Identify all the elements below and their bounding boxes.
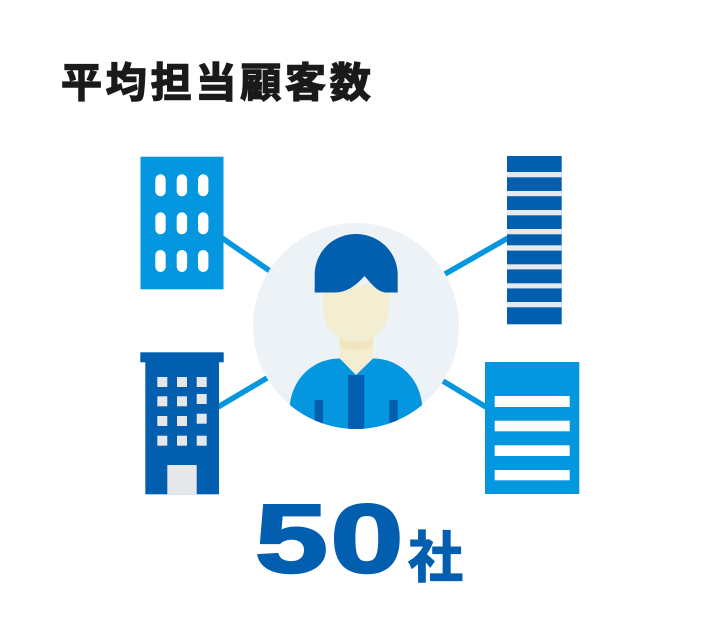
neck (340, 330, 373, 358)
title: 平均担当顧客数 (61, 60, 375, 106)
connector lines (218, 238, 508, 407)
icon: tower top right (507, 156, 562, 324)
face (323, 285, 389, 342)
icon: building bottom right (485, 362, 579, 494)
icon: person in circle (253, 223, 459, 440)
body (290, 358, 422, 429)
avatar background circle (253, 223, 459, 429)
value: 50 companies: 50 (255, 485, 406, 593)
icon: office building bottom left (140, 352, 224, 494)
value: 50 companies: 社 (408, 527, 463, 589)
hair (315, 234, 398, 292)
infographic: average number of clients (62, 61, 580, 583)
icon: office building top left (140, 157, 224, 289)
